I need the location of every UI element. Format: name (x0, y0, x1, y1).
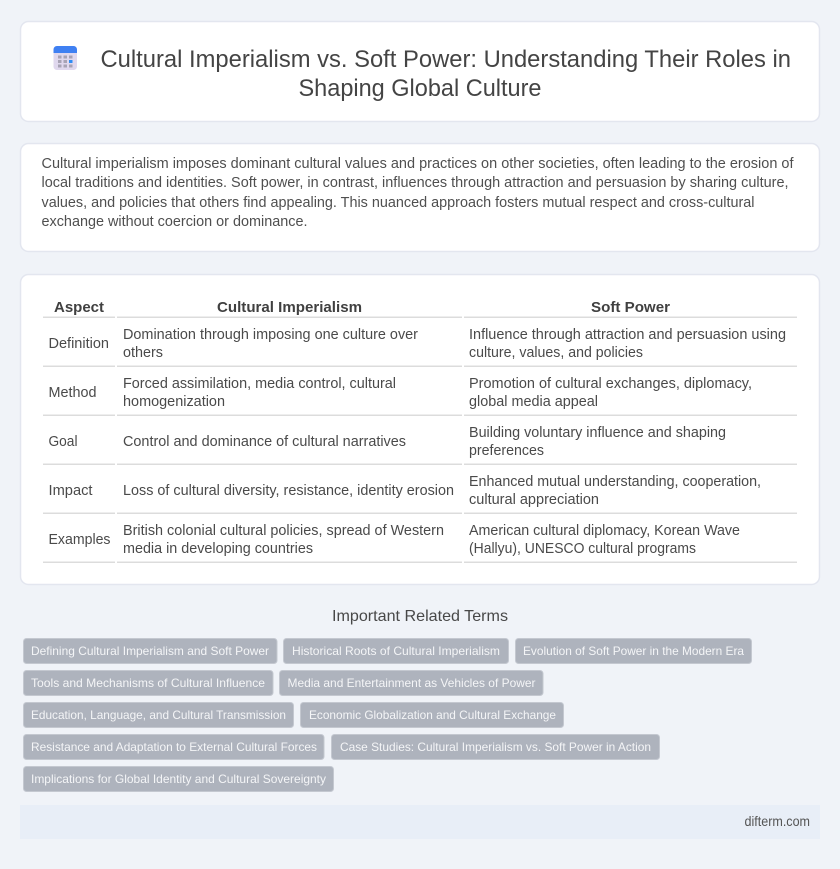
table row: method (48, 376, 752, 410)
tag (24, 766, 334, 792)
table row: impact (48, 474, 761, 508)
text block: introduction paragraph: local traditions and identities. Soft power, in contrast, influences through attraction and persuasion by sharing culture, (42, 175, 788, 191)
tag (24, 734, 324, 760)
tag (516, 638, 752, 664)
tag: Resistance and Adaptation to External Cultural Forces (31, 740, 317, 754)
table row: method: Forced assimilation, media control, cultural (123, 376, 396, 392)
table row: method: global media appeal (469, 394, 598, 410)
table row: goal: Building voluntary influence and shaping (469, 425, 726, 441)
tag (300, 702, 564, 728)
table header row: Cultural Imperialism (217, 299, 362, 316)
table row: examples: American cultural diplomacy, Korean Wave (469, 523, 740, 539)
tag: Education, Language, and Cultural Transmission (31, 708, 286, 722)
table row: definition: Influence through attraction and persuasion using (469, 327, 786, 343)
table row: method: Promotion of cultural exchanges, diplomacy, (469, 376, 752, 392)
icon: calendar (54, 46, 77, 70)
table row: impact: Loss of cultural diversity, resistance, identity erosion (123, 483, 454, 499)
table row: goal: preferences (469, 443, 544, 459)
table row: definition (48, 327, 786, 361)
tag (24, 638, 277, 664)
tag: Implications for Global Identity and Cultural Sovereignty (31, 772, 326, 786)
table row: method: homogenization (123, 394, 225, 410)
table row: goal (48, 425, 726, 459)
table row: impact: Enhanced mutual understanding, cooperation, (469, 474, 761, 490)
title: Shaping Global Culture (298, 75, 542, 102)
tag: Case Studies: Cultural Imperialism vs. Soft Power in Action (340, 740, 651, 754)
table row: examples: media in developing countries (123, 541, 313, 557)
tag: Economic Globalization and Cultural Exchange (309, 708, 556, 722)
table row: examples: Examples (48, 532, 110, 548)
tag: Evolution of Soft Power in the Modern Era (523, 644, 744, 658)
tag: Historical Roots of Cultural Imperialism (292, 644, 500, 658)
text block: introduction paragraph: exchange without coercion or dominance. (42, 214, 308, 230)
table row: goal: Control and dominance of cultural narratives (123, 434, 406, 450)
table row: definition: culture, values, and policies (469, 345, 643, 361)
table row: examples: British colonial cultural policies, spread of Western (123, 523, 444, 539)
panel: introduction (20, 144, 820, 252)
table row: method: Method (48, 385, 96, 401)
panel: comparison table (20, 274, 820, 584)
title: Cultural Imperialism vs. Soft Power: Understanding Their Roles in (100, 46, 791, 73)
tag (24, 702, 294, 728)
table row: impact: cultural appreciation (469, 492, 599, 508)
tag (332, 734, 660, 760)
related terms tags (24, 638, 752, 792)
table row: definition: others (123, 345, 163, 361)
heading: important related terms: Important Related Terms (332, 608, 508, 625)
table row: examples: (Hallyu), UNESCO cultural programs (469, 541, 696, 557)
text block: introduction paragraph: Cultural imperialism imposes dominant cultural values and practices on other societies, often leading to the erosion of (42, 156, 794, 172)
footer (20, 805, 820, 839)
text block: introduction paragraph (42, 156, 794, 230)
tag: Media and Entertainment as Vehicles of Power (288, 676, 536, 690)
panel: header card (20, 22, 820, 122)
table row: definition: Definition (48, 336, 109, 352)
text block: introduction paragraph: values, and policies that others find appealing. This nuanced approach fosters mutual respect and cross-cultural (42, 195, 754, 211)
tag (24, 670, 273, 696)
footer: difterm.com (744, 813, 810, 829)
table header row: Aspect (54, 299, 104, 316)
table row: goal: Goal (48, 434, 78, 450)
tag (284, 638, 508, 664)
table row: definition: Domination through imposing one culture over (123, 327, 418, 343)
title (100, 46, 791, 102)
table header row (54, 299, 670, 316)
tag: Tools and Mechanisms of Cultural Influence (31, 676, 265, 690)
table header row: Soft Power (591, 299, 670, 316)
tag: Defining Cultural Imperialism and Soft Power (31, 644, 269, 658)
tag (280, 670, 543, 696)
table row: examples (48, 523, 740, 557)
table row: impact: Impact (48, 483, 92, 499)
